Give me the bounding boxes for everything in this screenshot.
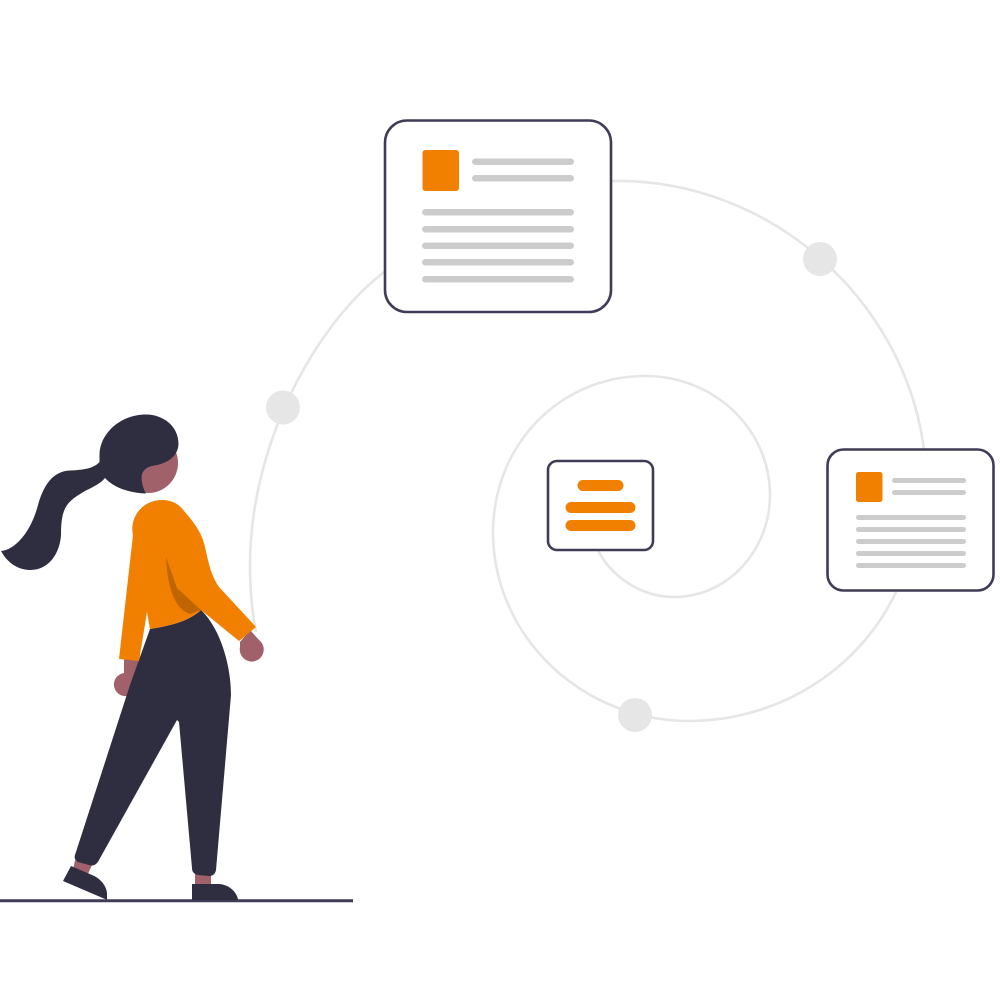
pants bbox=[75, 610, 231, 876]
card: centre menu bbox=[548, 461, 653, 550]
hair and ponytail bbox=[1, 414, 178, 570]
spiral node: top right bbox=[803, 242, 837, 276]
shoes bbox=[63, 866, 238, 900]
card text lines bbox=[856, 478, 966, 568]
spiral path bbox=[250, 181, 924, 721]
card thumbnail bbox=[856, 472, 882, 502]
spiral node: bottom bbox=[618, 698, 652, 732]
card thumbnail bbox=[422, 150, 459, 191]
menu bars bbox=[566, 480, 636, 531]
spiral node: left bbox=[266, 390, 300, 424]
left arm skin bbox=[114, 655, 140, 696]
card text lines bbox=[422, 158, 574, 282]
card: right document bbox=[828, 450, 994, 590]
person bbox=[1, 414, 264, 900]
card: top document bbox=[385, 120, 611, 312]
shirt shadow bbox=[166, 557, 201, 614]
shirt bbox=[119, 500, 256, 661]
ankles bbox=[73, 860, 211, 886]
ground line bbox=[0, 899, 353, 902]
right hand bbox=[240, 630, 264, 662]
head bbox=[118, 433, 178, 493]
